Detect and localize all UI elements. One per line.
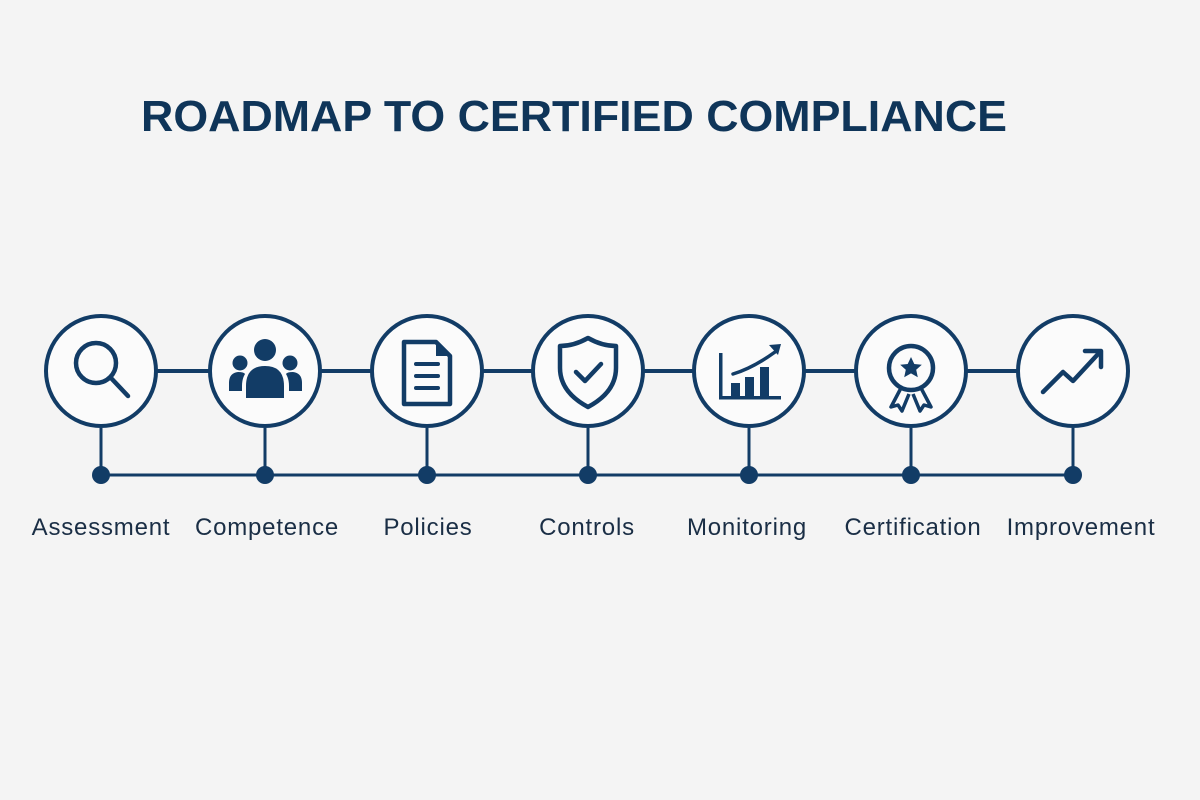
labels: Improvement: [1007, 514, 1155, 541]
icon: trend arrow: [1043, 351, 1101, 392]
labels: Monitoring: [687, 514, 807, 541]
icon: award medal: [889, 346, 933, 411]
title: ROADMAP TO CERTIFIED COMPLIANCE: [141, 92, 1007, 141]
labels: Certification: [844, 514, 982, 541]
labels: Assessment: [32, 514, 170, 541]
timeline base line: [101, 474, 1073, 476]
icon: people: [229, 339, 302, 398]
labels: Policies: [383, 514, 473, 541]
labels: Controls: [539, 514, 635, 541]
connector line between circles: [157, 369, 1017, 373]
icon: shield check: [560, 338, 616, 407]
icon: bar chart with arrow: [719, 344, 781, 400]
labels: [32, 514, 1155, 541]
icon: document: [404, 342, 450, 404]
labels: Competence: [195, 514, 339, 541]
icon: magnifier: [76, 343, 128, 396]
